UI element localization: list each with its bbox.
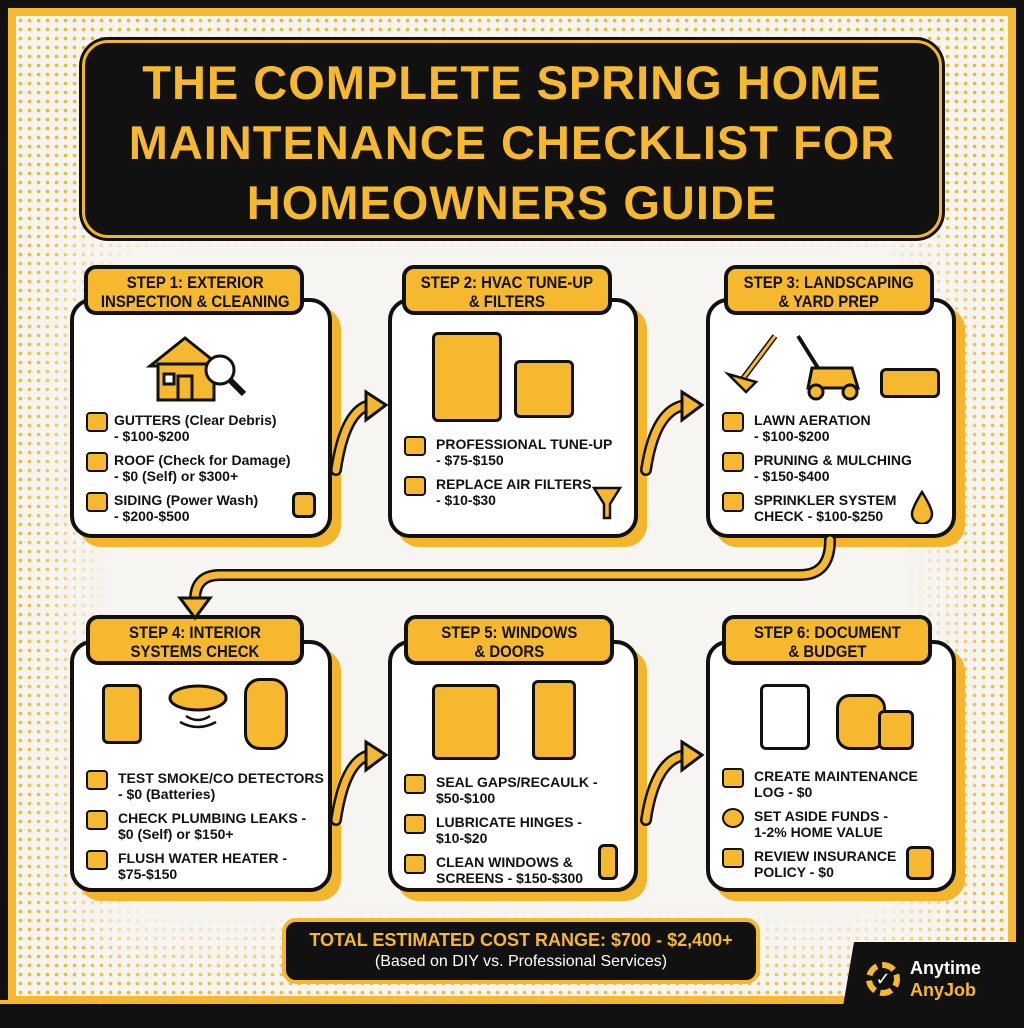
logo — [843, 942, 1024, 1004]
icon: mower — [796, 335, 860, 400]
tab: step 6: & BUDGET — [788, 642, 866, 661]
clean item: CLEAN WINDOWS & — [436, 854, 573, 870]
smoke item: - $0 (Batteries) — [118, 786, 215, 802]
log item: LOG - $0 — [754, 784, 812, 800]
tab: step 4 — [86, 615, 304, 665]
title: MAINTENANCE CHECKLIST FOR — [129, 116, 895, 169]
sprinkler item: CHECK - $100-$250 — [754, 508, 883, 524]
icon: dollar — [722, 808, 744, 828]
pruning item: - $150-$400 — [754, 468, 830, 484]
icon: window small — [404, 854, 426, 874]
icon: grass — [722, 412, 744, 432]
insurance item: REVIEW INSURANCE — [754, 848, 896, 864]
tab: step 6 — [722, 615, 932, 665]
tab: step 2: & FILTERS — [469, 292, 545, 311]
insurance item — [754, 848, 896, 880]
gutters item: - $100-$200 — [114, 428, 190, 444]
tab: step 3: STEP 3: LANDSCAPING — [744, 273, 914, 292]
water heater item — [118, 850, 287, 882]
icon: heater small — [86, 850, 108, 870]
panel: step 5 — [388, 640, 638, 892]
icon: smoke detector — [168, 684, 228, 728]
tab: step 3 — [724, 265, 934, 315]
tune-up item — [436, 436, 612, 468]
tune-up item: - $75-$150 — [436, 452, 504, 468]
funds item: 1-2% HOME VALUE — [754, 824, 883, 840]
smoke item — [118, 770, 324, 802]
icon: pipe — [86, 810, 108, 830]
icon: window and door — [432, 684, 500, 760]
hinges item — [436, 814, 582, 846]
icon: bucket — [292, 492, 316, 518]
tab: step 1: STEP 1: EXTERIOR — [127, 273, 264, 292]
icon: gutter — [86, 412, 108, 432]
tab: step 4: SYSTEMS CHECK — [131, 642, 259, 661]
smoke item: TEST SMOKE/CO DETECTORS — [118, 770, 324, 786]
tab: step 6: STEP 6: DOCUMENT — [754, 623, 900, 642]
insurance item: POLICY - $0 — [754, 864, 834, 880]
panel: step 1 — [70, 298, 332, 538]
filters item: REPLACE AIR FILTERS — [436, 476, 592, 492]
icon: hvac — [432, 332, 502, 422]
log item: CREATE MAINTENANCE — [754, 768, 918, 784]
title — [82, 40, 942, 238]
panel: step 2 — [388, 298, 638, 538]
icon: plant — [722, 452, 744, 472]
logo: AnyJob — [910, 980, 976, 1000]
roof item: - $0 (Self) or $300+ — [114, 468, 238, 484]
gutters item: GUTTERS (Clear Debris) — [114, 412, 277, 428]
icon: gear check — [866, 962, 900, 996]
siding item: - $200-$500 — [114, 508, 190, 524]
pruning item: PRUNING & MULCHING — [754, 452, 912, 468]
tab: step 5 — [404, 615, 614, 665]
plumbing item — [118, 810, 306, 842]
icon: wrench — [404, 436, 426, 456]
seal item — [436, 774, 598, 806]
pruning item — [754, 452, 912, 484]
hinges item: $10-$20 — [436, 830, 487, 846]
logo: Anytime — [910, 958, 981, 978]
tab: step 5: STEP 5: WINDOWS — [441, 623, 577, 642]
panel: step 6 — [706, 640, 956, 892]
filters item: - $10-$30 — [436, 492, 496, 508]
plumbing item: CHECK PLUMBING LEAKS - — [118, 810, 306, 826]
bottom band — [0, 1000, 1024, 1028]
filters item — [436, 476, 592, 508]
icon: calendar — [722, 768, 744, 788]
icon: spray bottle — [598, 844, 618, 880]
siding item: SIDING (Power Wash) — [114, 492, 258, 508]
clean item — [436, 854, 583, 886]
gutters item — [114, 412, 277, 444]
icon: gear check: ✓ — [875, 969, 891, 989]
funds item — [754, 808, 888, 840]
icon: filter — [404, 476, 426, 496]
plumbing item: $0 (Self) or $150+ — [118, 826, 234, 842]
icon: flowers — [880, 368, 940, 398]
clean item: SCREENS - $150-$300 — [436, 870, 583, 886]
sprinkler item — [754, 492, 896, 524]
icon: document — [906, 846, 934, 880]
hinges item: LUBRICATE HINGES - — [436, 814, 582, 830]
roof item — [114, 452, 291, 484]
aeration item — [754, 412, 871, 444]
tab: step 5: & DOORS — [474, 642, 544, 661]
icon: shield — [722, 848, 744, 868]
panel: step 4 — [70, 640, 332, 892]
tab: step 3: & YARD PREP — [779, 292, 879, 311]
icon: roof — [86, 452, 108, 472]
icon: clipboard and coins — [760, 684, 810, 750]
tab: step 1 — [84, 265, 304, 315]
icon: outlet — [102, 684, 142, 744]
funds item: SET ASIDE FUNDS - — [754, 808, 888, 824]
icon: funnel — [592, 486, 622, 520]
total cost box: TOTAL ESTIMATED COST RANGE: $700 - $2,400+ — [309, 930, 733, 950]
seal item: SEAL GAPS/RECAULK - — [436, 774, 598, 790]
water heater item: FLUSH WATER HEATER - — [118, 850, 287, 866]
total cost box — [282, 918, 760, 984]
sprinkler item: SPRINKLER SYSTEM — [754, 492, 896, 508]
total cost box: (Based on DIY vs. Professional Services) — [375, 953, 667, 970]
tab: step 2 — [402, 265, 612, 315]
icon: siding — [86, 492, 108, 512]
icon: water heater — [244, 678, 288, 750]
tab: step 4: STEP 4: INTERIOR — [129, 623, 261, 642]
icon: house with magnifier — [146, 336, 246, 402]
panel: step 3 — [706, 298, 956, 538]
siding item — [114, 492, 258, 524]
tab: step 1: INSPECTION & CLEANING — [101, 292, 290, 311]
log item — [754, 768, 918, 800]
icon: rake — [724, 334, 778, 394]
water heater item: $75-$150 — [118, 866, 177, 882]
icon: drop — [910, 490, 934, 524]
tab: step 2: STEP 2: HVAC TUNE-UP — [421, 273, 593, 292]
title: HOMEOWNERS GUIDE — [247, 176, 777, 229]
icon: caulk — [404, 774, 426, 794]
roof item: ROOF (Check for Damage) — [114, 452, 291, 468]
seal item: $50-$100 — [436, 790, 495, 806]
tune-up item: PROFESSIONAL TUNE-UP — [436, 436, 612, 452]
aeration item: LAWN AERATION — [754, 412, 871, 428]
icon: sprinkler — [722, 492, 744, 512]
icon: hinge — [404, 814, 426, 834]
aeration item: - $100-$200 — [754, 428, 830, 444]
title: THE COMPLETE SPRING HOME — [142, 56, 882, 109]
icon: battery — [86, 770, 108, 790]
